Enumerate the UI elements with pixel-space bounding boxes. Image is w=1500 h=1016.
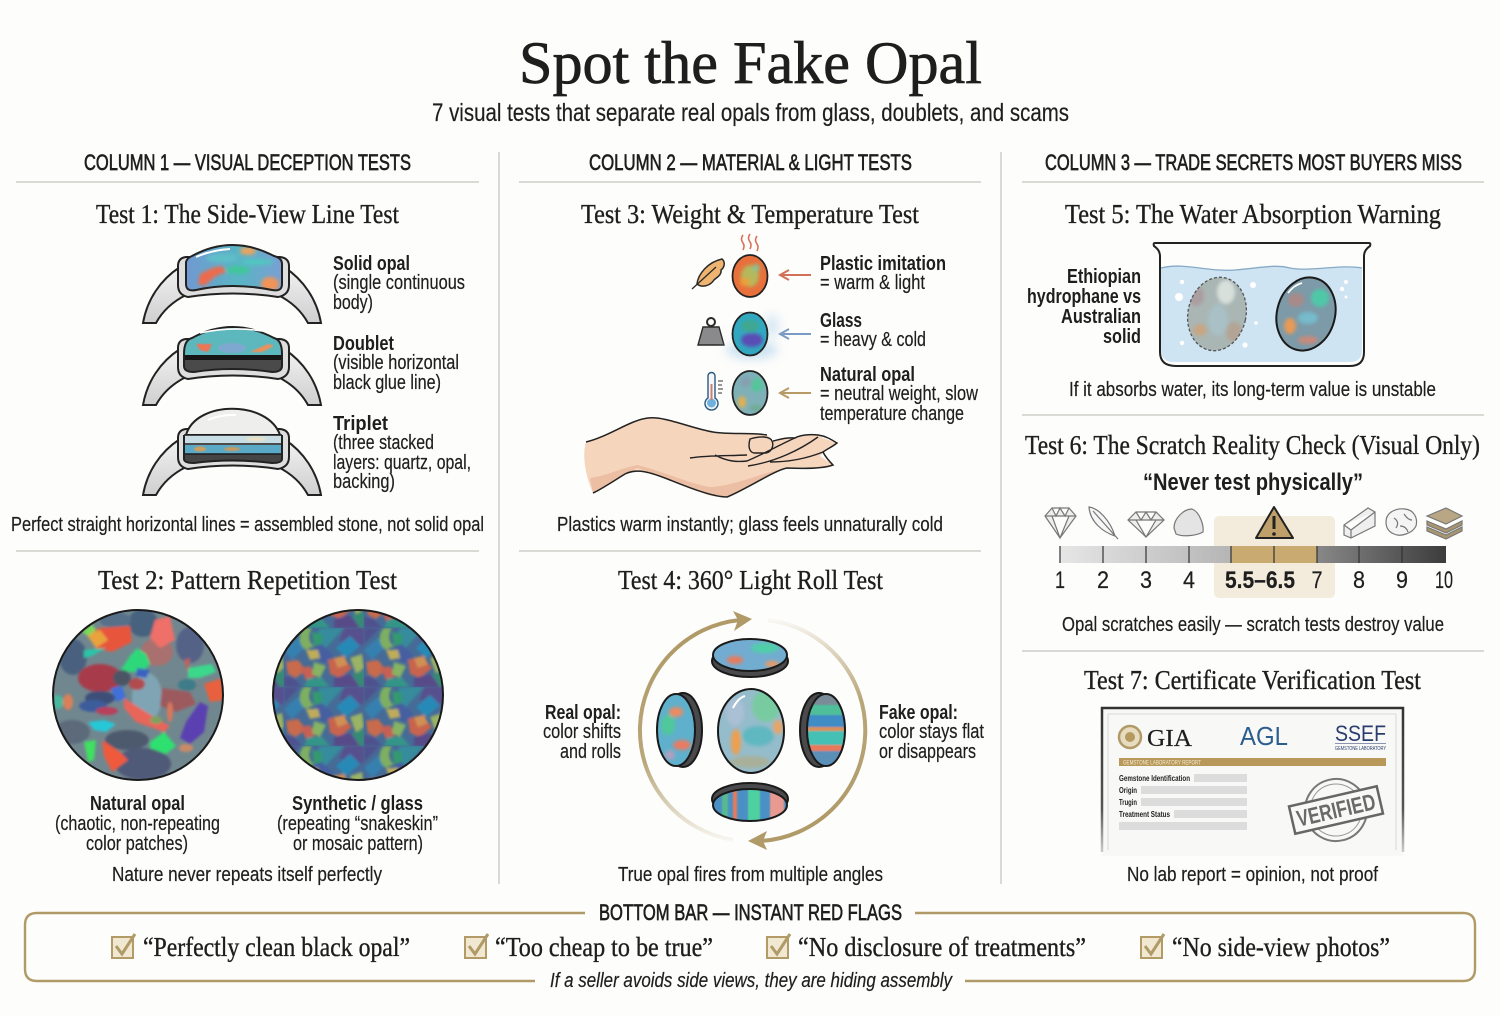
column 2 heading: COLUMN 2 — MATERIAL & LIGHT TESTS: [589, 150, 912, 175]
illustration: lab certificate: [1102, 708, 1403, 856]
label: glass: [820, 310, 926, 351]
arrow: plastic: [780, 270, 811, 280]
heading: test 2: Test 2: Pattern Repetition Test: [98, 565, 397, 595]
arrow: rotation left arc: [640, 611, 752, 840]
illustration: bottom tilted opal with stripes: [712, 783, 788, 822]
label: synthetic glass: or mosaic pattern): [293, 833, 423, 855]
caption: test 2: Nature never repeats itself perfectly: [112, 864, 382, 886]
logo: GIA: GIA: [1147, 726, 1193, 752]
heading: test 3: Test 3: Weight & Temperature Test: [581, 199, 919, 229]
icons: mineral scale: [1045, 507, 1462, 539]
label: ethiopian vs australian: hydrophane vs: [1027, 286, 1141, 308]
label: triplet: layers: quartz, opal,: [333, 452, 471, 474]
arrow: rotation right arc: [748, 620, 865, 850]
red flag 2: “Too cheap to be true”: [495, 932, 713, 962]
label: solid opal: [333, 253, 465, 314]
report fields: Treatment Status: [1119, 810, 1170, 819]
panel: test 4 light roll test: [543, 565, 984, 886]
report fields: Origin: [1119, 786, 1137, 795]
icon: heat waves: [742, 234, 758, 251]
label: glass: = heavy & cold: [820, 329, 926, 351]
label: real opal: color shifts: [543, 721, 621, 743]
label: solid opal: body): [333, 292, 373, 314]
label: natural opal: Natural opal: [90, 793, 185, 815]
scale numbers: 5.5–6.5: [1225, 567, 1295, 594]
label: ethiopian vs australian: [1027, 266, 1141, 348]
label: plastic imitation: = warm & light: [820, 272, 925, 294]
caption: test 5: If it absorbs water, its long-term value is unstable: [1069, 379, 1436, 401]
label: doublet: (visible horizontal: [333, 352, 459, 374]
label: triplet: backing): [333, 471, 395, 493]
opal: ethiopian hydrophane: [1187, 276, 1248, 352]
hardness scale bar: [1060, 546, 1446, 563]
panel: test 1 side-view line test: [11, 199, 484, 536]
red flag 1: “Perfectly clean black opal”: [143, 932, 410, 962]
gold report bar: [1119, 758, 1386, 766]
scale numbers: 4: [1183, 567, 1195, 594]
scale numbers: 10: [1435, 567, 1453, 594]
panel: bottom bar instant red flags: [25, 900, 1475, 992]
effect: cold mist: [726, 314, 779, 359]
label: fake opal: Fake opal:: [879, 702, 958, 724]
label: plastic imitation: Plastic imitation: [820, 253, 946, 275]
label: fake opal: color stays flat: [879, 721, 984, 743]
report fields: Gemstone Identification: [1119, 774, 1190, 783]
stamp: verified: VERIFIED: [1294, 788, 1378, 832]
bar heading: BOTTOM BAR — INSTANT RED FLAGS: [599, 900, 902, 925]
label: doublet: black glue line): [333, 372, 441, 394]
panel: test 5 water absorption warning: [1027, 199, 1441, 401]
label: natural opal: [820, 364, 978, 425]
report fields: Trugin: [1119, 798, 1137, 807]
label: doublet: Doublet: [333, 333, 394, 355]
illustration: left tilted opal: [657, 693, 702, 767]
bar footnote: If a seller avoids side views, they are hiding assembly: [550, 970, 953, 992]
gold report bar: GEMSTONE LABORATORY REPORT: [1123, 760, 1201, 766]
heading: test 5: Test 5: The Water Absorption Warning: [1065, 199, 1441, 229]
panel: test 6 scratch reality check: [1025, 430, 1480, 636]
label: real opal: Real opal:: [545, 702, 621, 724]
callout: never test physically: “Never test physically”: [1143, 469, 1363, 496]
report fields: [1119, 774, 1247, 830]
scale numbers: 8: [1353, 567, 1365, 594]
scale numbers: [1055, 567, 1453, 594]
scale numbers: 3: [1140, 567, 1152, 594]
panel: test 2 pattern repetition test: [53, 565, 443, 886]
label: solid opal: Solid opal: [333, 253, 410, 275]
label: triplet: (three stacked: [333, 432, 434, 454]
caption: test 1: Perfect straight horizontal lines = assembled stone, not solid opal: [11, 514, 484, 536]
illustration: triplet ring: [143, 409, 321, 495]
arrow: glass: [780, 329, 811, 339]
label: fake opal: [879, 702, 984, 763]
illustration: right tilted opal with stripes: [800, 693, 847, 767]
icon: feather: [692, 259, 724, 289]
label: synthetic glass: [277, 793, 438, 855]
label: fake opal: or disappears: [879, 741, 976, 763]
illustration: glass opal: [732, 312, 768, 356]
label: real opal: and rolls: [560, 741, 621, 763]
icon: warning triangle: [1256, 507, 1293, 538]
illustration: open hand: [584, 418, 837, 497]
heading: test 7: Test 7: Certificate Verification Test: [1084, 665, 1421, 695]
title: Spot the Fake Opal: [519, 30, 982, 96]
illustration: solid opal ring: [143, 245, 321, 323]
label: plastic imitation: [820, 253, 946, 294]
label: triplet: [333, 413, 471, 493]
label: glass: Glass: [820, 310, 862, 332]
red flag 3: “No disclosure of treatments”: [798, 932, 1086, 962]
illustration: synthetic mosaic disc: [273, 610, 443, 780]
scale numbers: 9: [1396, 567, 1408, 594]
illustration: top tilted opal: [712, 639, 788, 677]
scale numbers: 1: [1055, 567, 1065, 594]
illustration: natural opal disc: [53, 609, 224, 780]
highlight: opal hardness zone: [1214, 516, 1335, 598]
column 1 heading: COLUMN 1 — VISUAL DECEPTION TESTS: [84, 150, 411, 175]
caption: test 7: No lab report = opinion, not proof: [1127, 864, 1378, 886]
heading: test 4: Test 4: 360° Light Roll Test: [618, 565, 883, 595]
logo: SSEF: GEMSTONE LABORATORY: [1335, 746, 1387, 752]
illustration: beaker of water with two opals: [1154, 243, 1370, 366]
illustration: natural opal: [732, 371, 768, 415]
label: ethiopian vs australian: solid: [1103, 326, 1141, 348]
logo: SSEF: SSEF: [1335, 721, 1386, 746]
logo: GIA: [1119, 726, 1193, 752]
label: natural opal: color patches): [86, 833, 188, 855]
illustration: doublet ring: [143, 327, 321, 405]
label: ethiopian vs australian: Australian: [1061, 306, 1141, 328]
illustration: plastic imitation opal: [732, 255, 768, 297]
icon: thermometer: [705, 372, 723, 410]
label: ethiopian vs australian: Ethiopian: [1067, 266, 1141, 288]
label: natural opal: [55, 793, 220, 855]
icon: weight: [698, 318, 724, 345]
label: solid opal: (single continuous: [333, 272, 465, 294]
heading: test 1: Test 1: The Side-View Line Test: [96, 199, 399, 229]
label: triplet: Triplet: [333, 413, 388, 435]
arrow: natural: [780, 388, 811, 398]
stamp: verified: [1285, 770, 1387, 850]
panel: test 7 certificate verification test: [1084, 665, 1421, 886]
label: real opal: [543, 702, 621, 763]
label: synthetic glass: (repeating “snakeskin”: [277, 813, 438, 835]
scale numbers: 2: [1097, 567, 1109, 594]
opal: australian solid: [1275, 276, 1337, 352]
illustration: center opal: [718, 689, 784, 773]
bar frame: [25, 913, 1475, 981]
panel: test 3 weight and temperature test: [557, 199, 978, 536]
caption: test 3: Plastics warm instantly; glass feels unnaturally cold: [557, 514, 943, 536]
caption: test 4: True opal fires from multiple angles: [618, 864, 883, 886]
label: doublet: [333, 333, 459, 394]
logo: AGL: AGL: [1240, 721, 1288, 751]
red flag 4: “No side-view photos”: [1172, 932, 1390, 962]
scale numbers: 7: [1312, 567, 1322, 594]
label: natural opal: Natural opal: [820, 364, 915, 386]
label: natural opal: (chaotic, non-repeating: [55, 813, 220, 835]
label: natural opal: temperature change: [820, 403, 964, 425]
subtitle: 7 visual tests that separate real opals from glass, doublets, and scams: [432, 99, 1069, 127]
label: natural opal: = neutral weight, slow: [820, 383, 978, 405]
label: synthetic glass: Synthetic / glass: [292, 793, 423, 815]
